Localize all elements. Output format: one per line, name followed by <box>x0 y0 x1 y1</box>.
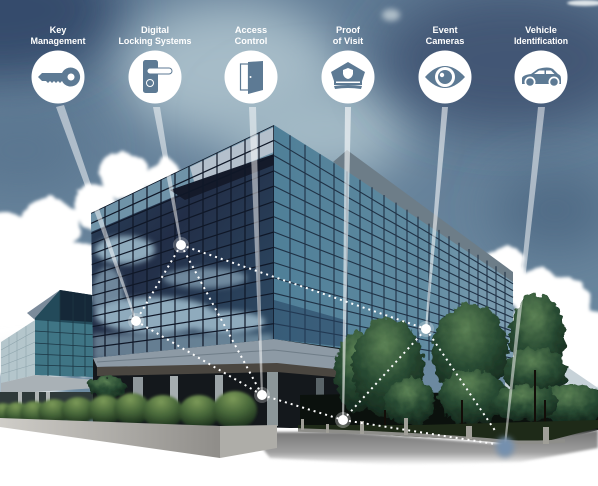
clouds: left <box>0 152 183 405</box>
dotted network lines <box>136 245 496 444</box>
label: Key <box>50 25 67 35</box>
label: Cameras <box>426 36 464 46</box>
icon: key <box>38 68 80 86</box>
icon circle <box>514 50 568 104</box>
item: proof of visit <box>322 25 374 104</box>
icon: officer cap <box>331 62 365 89</box>
left background building <box>0 290 97 406</box>
node 6: blurred end point <box>496 437 514 457</box>
item: digital locking systems <box>118 25 192 104</box>
label: Digital <box>141 25 169 35</box>
item: key management <box>30 25 86 104</box>
label: Identification <box>514 36 568 46</box>
ground: white foreground <box>0 420 598 486</box>
trees and understory <box>300 294 598 443</box>
beam: proof of visit <box>342 107 351 420</box>
main building: left glass face <box>91 125 274 360</box>
label: Access <box>235 25 267 35</box>
item: event cameras <box>418 25 472 104</box>
beam: access control <box>249 107 263 395</box>
label: Vehicle <box>525 25 557 35</box>
node 5 <box>418 321 434 337</box>
clouds: right <box>481 246 598 390</box>
node 2 <box>128 313 144 329</box>
main building: roof block <box>333 150 513 284</box>
beam: vehicle identification <box>504 107 545 445</box>
item: vehicle identification <box>514 25 568 104</box>
hedge row <box>0 391 257 429</box>
icon: open door <box>240 61 263 94</box>
dark understory <box>300 390 598 443</box>
node 3 <box>254 387 270 403</box>
icon: car <box>522 68 561 88</box>
label: Control <box>235 36 267 46</box>
icon: eye <box>425 66 465 88</box>
label: Management <box>30 36 86 46</box>
icon circle <box>32 50 84 104</box>
node 4 <box>335 412 351 428</box>
icon circle <box>322 50 374 104</box>
right background building <box>505 362 598 420</box>
label: Locking Systems <box>118 36 192 46</box>
icon: door handle lock <box>143 60 172 93</box>
label: of Visit <box>333 36 363 46</box>
beam: digital locking <box>153 107 182 245</box>
icon circle <box>224 50 278 104</box>
icon circle <box>128 50 182 104</box>
label: Proof <box>336 25 361 35</box>
icon circle <box>418 50 472 104</box>
network nodes <box>128 237 514 457</box>
main building: right glass face <box>274 125 513 372</box>
node 1 <box>173 237 189 253</box>
gravel strip and lawn <box>298 420 598 443</box>
concrete planter <box>0 418 277 458</box>
item: access control <box>224 25 278 104</box>
bollards <box>301 418 549 444</box>
small tree behind hedge <box>88 376 126 398</box>
main building: ground floor <box>93 339 345 432</box>
ground: paved plaza <box>250 430 598 465</box>
beam: event cameras <box>425 107 448 329</box>
light beams from icons to nodes <box>56 105 545 445</box>
beam: key management <box>56 105 137 321</box>
label: Event <box>432 25 458 35</box>
